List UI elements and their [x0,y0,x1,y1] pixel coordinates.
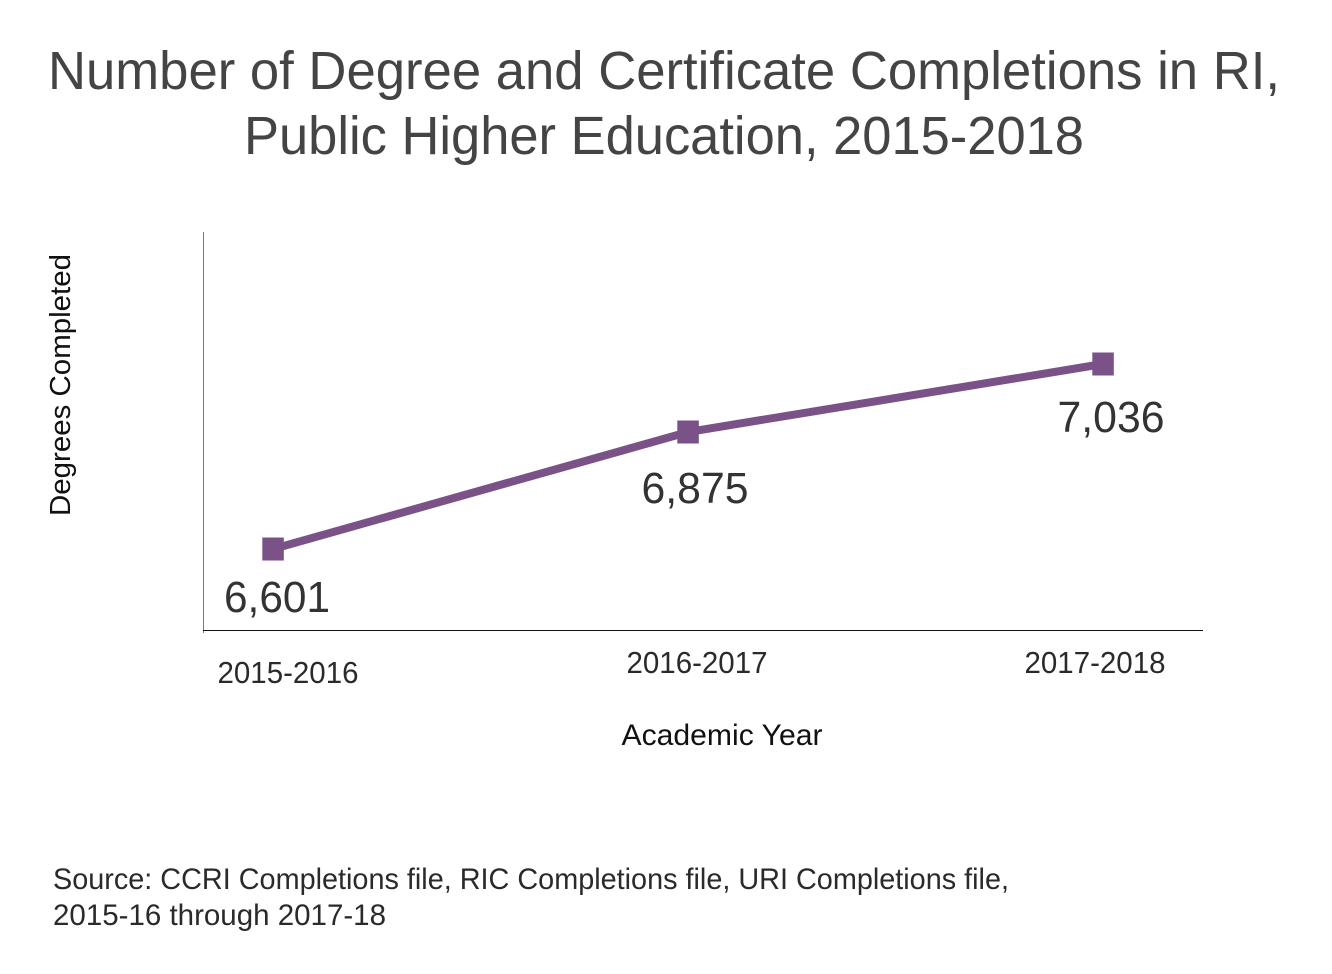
data labels: 6,875 [642,464,748,513]
title: Number of Degree and Certificate Completions in RI, [48,41,1280,101]
x axis labels: 2017-2018 [1024,645,1166,680]
source note: 2015-16 through 2017-18 [53,899,386,932]
x axis title: Academic Year [622,719,822,752]
x axis labels [218,645,1166,690]
chart axes [203,232,1203,633]
title [48,41,1280,166]
source note [53,863,1009,932]
source note: Source: CCRI Completions file, RIC Completions file, URI Completions file, [53,863,1009,896]
title: Public Higher Education, 2015-2018 [244,106,1084,166]
data labels: 7,036 [1058,393,1164,442]
y axis title: Degrees Completed [45,254,77,516]
data labels [224,393,1164,622]
x axis labels: 2016-2017 [626,645,768,680]
data labels: 6,601 [224,573,330,622]
line series [262,352,1114,560]
x axis labels: 2015-2016 [218,655,358,690]
